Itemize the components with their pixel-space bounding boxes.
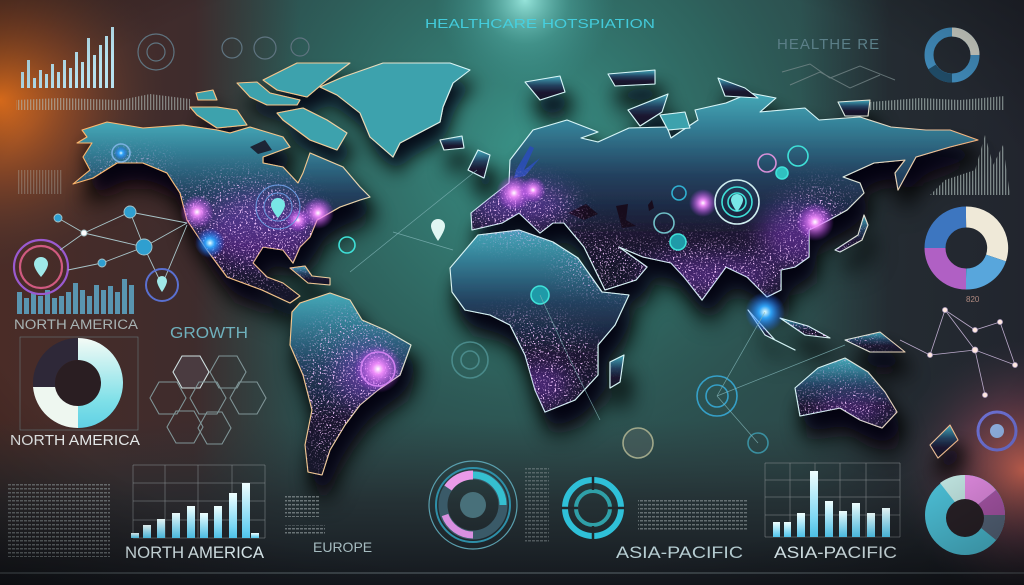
connection lines [350, 170, 845, 443]
chart: left bars [17, 279, 134, 314]
title: HEALTHCARE HOTSPIATION [425, 16, 655, 31]
chart: left faint strip [18, 170, 63, 194]
chart: top-right donut [929, 32, 975, 78]
heading: healthcare: HEALTHE RE [777, 36, 880, 53]
chart: right donut [935, 217, 998, 279]
label: north america bottom: NORTH AMERICA [125, 544, 264, 562]
panel: top-right sketch lines [782, 64, 895, 88]
chart: bottom-left bars [131, 465, 265, 538]
text block: grey lines bottom-centre-left [285, 495, 325, 535]
honeycomb diagram [150, 356, 266, 444]
chart: bottom-right pie [925, 475, 1005, 555]
label: right small number: 820 [966, 295, 980, 304]
chart: right histogram strip [870, 96, 1010, 195]
panel: top-left rings [138, 34, 309, 70]
chart: left donut in frame [20, 337, 138, 430]
purple lights haze and speckle [80, 140, 896, 474]
icon: left location target [14, 240, 68, 294]
chart: bottom-right bars [765, 463, 900, 537]
text block: bottom-left noise lines [7, 483, 110, 557]
panel: top-left bar chart [16, 27, 190, 110]
label: europe: EUROPE [313, 539, 372, 555]
world map [72, 62, 984, 504]
location rings [112, 144, 808, 458]
chart: bottom-centre ring dial [561, 476, 625, 540]
long cast shadows [81, 96, 986, 501]
network graph: right [900, 308, 1018, 398]
text block: small stack [525, 468, 549, 542]
label: asia-pacific centre: ASIA-PACIFIC [616, 544, 743, 562]
inland seas [250, 140, 654, 228]
hotspots [114, 146, 834, 393]
text block: bottom centre lines [638, 498, 748, 531]
continents [73, 63, 978, 475]
label: growth: GROWTH [170, 325, 248, 342]
icon: right pin ring [978, 412, 1016, 450]
label: north america middle: NORTH AMERICA [10, 432, 140, 449]
label: north america upper: NORTH AMERICA [14, 317, 138, 332]
network graph: left [54, 206, 187, 301]
map pins [271, 194, 743, 241]
label: asia-pacific right: ASIA-PACIFIC [774, 544, 897, 562]
chart: bottom-centre globe dial [429, 461, 517, 549]
